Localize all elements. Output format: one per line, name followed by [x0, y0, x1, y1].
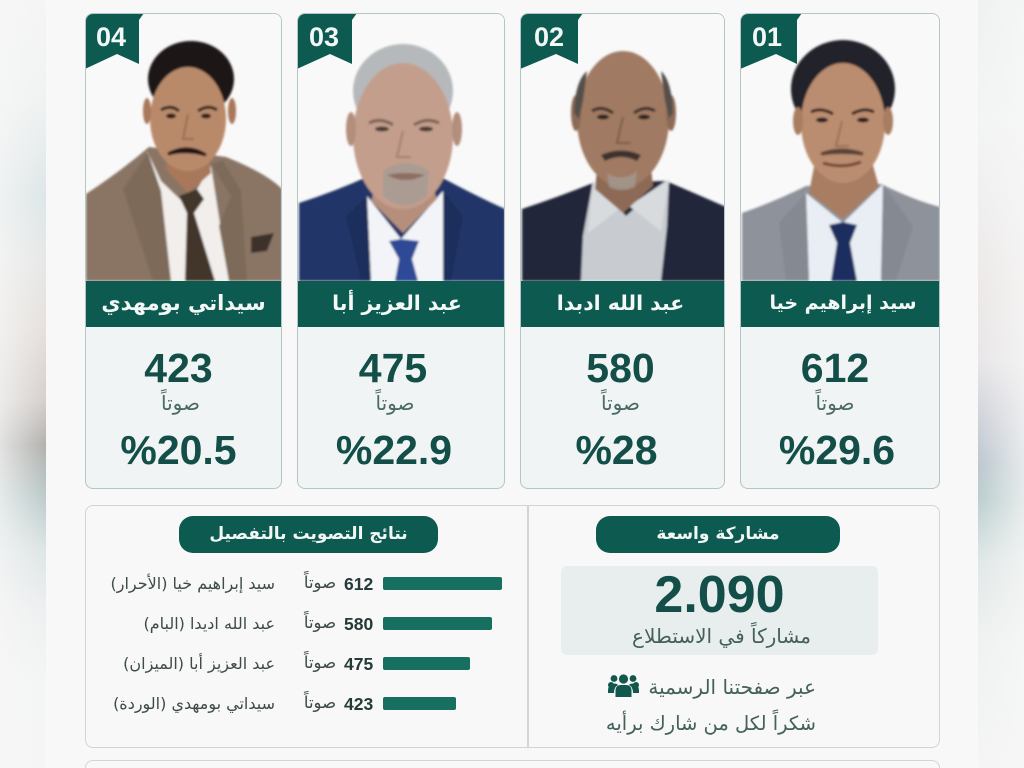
- name band: عبد الله ادبدا: [557, 291, 684, 315]
- panel: summary: [85, 505, 940, 748]
- text: thanks to all participants: شكراً لكل من شارك برأيه: [606, 712, 816, 735]
- percentage: %28: [575, 427, 658, 473]
- heading: wide participation: مشاركة واسعة: [656, 524, 780, 544]
- percentage: %22.9: [336, 427, 452, 473]
- vote count: 580: [586, 345, 655, 391]
- vote unit: صوتاً: [601, 391, 640, 415]
- candidate card 02: [520, 13, 725, 489]
- portrait: Sid Ibrahim Khaya: [741, 14, 939, 281]
- name band: سيداتي بومهدي: [101, 291, 266, 315]
- heading: wide participation: [596, 516, 840, 553]
- row: Abdallahi Adabda: صوتاً: [304, 613, 336, 632]
- text: via our official page: عبر صفحتنا الرسمية: [648, 675, 816, 699]
- name band: سيد إبراهيم خيا: [769, 292, 917, 314]
- name band: [86, 281, 281, 327]
- row: Abdel Aziz Abba: صوتاً: [304, 653, 336, 672]
- rank ribbon 02: [521, 14, 582, 69]
- row: Sid Ibrahim Khaya: صوتاً: [304, 573, 336, 592]
- name band: عبد العزيز أبا: [332, 291, 462, 315]
- row: Sidaty Boumehdi: صوتاً: [304, 693, 336, 712]
- panel: next section, cut off at the bottom: [85, 760, 940, 768]
- vote count: 423: [144, 345, 213, 391]
- row: Sidaty Boumehdi: سيداتي بومهدي (الوردة): [113, 694, 275, 713]
- rank ribbon 02: 02: [534, 22, 564, 52]
- row: Abdel Aziz Abba: 475: [344, 654, 373, 674]
- row: Abdallahi Adabda: عبد الله اديدا (البام): [143, 614, 275, 633]
- divider: [527, 506, 528, 747]
- row: Sidaty Boumehdi: [113, 690, 456, 714]
- rank ribbon 03: 03: [309, 22, 339, 52]
- row: Abdel Aziz Abba: [123, 650, 470, 674]
- row: Abdallahi Adabda: 580: [344, 614, 373, 634]
- percentage: %29.6: [779, 427, 895, 473]
- rank ribbon 04: 04: [96, 22, 126, 52]
- blurred left background strip: [0, 0, 46, 768]
- row: Sid Ibrahim Khaya: [110, 570, 502, 594]
- vote unit: صوتاً: [161, 391, 200, 415]
- icon: group of people: [608, 674, 639, 697]
- name band: [741, 281, 939, 327]
- candidate card 03: [297, 13, 505, 489]
- candidate card 01: [740, 13, 940, 489]
- row: Sidaty Boumehdi: 423: [344, 694, 373, 714]
- row: Sid Ibrahim Khaya: 612: [344, 574, 373, 594]
- total number: 2.090: [654, 566, 785, 624]
- rank ribbon 03: [298, 14, 356, 68]
- row: Sid Ibrahim Khaya: سيد إبراهيم خيا (الأحرار): [110, 574, 275, 593]
- bar chart: votes per candidate: [110, 570, 502, 714]
- vote unit: صوتاً: [376, 391, 414, 415]
- vote unit: صوتاً: [816, 391, 854, 415]
- rank ribbon 01: 01: [752, 22, 782, 52]
- name band: [521, 281, 724, 327]
- rank ribbon 01: [741, 14, 802, 69]
- vote count: 475: [359, 345, 427, 391]
- stat box: total participants: [561, 566, 878, 655]
- candidate card 04: [85, 13, 282, 489]
- portrait: Sidaty Boumehdi: [86, 14, 281, 281]
- portrait: Abdallahi Adabda: [521, 14, 724, 281]
- row: Abdallahi Adabda: [143, 610, 492, 634]
- vote count: 612: [801, 345, 869, 391]
- total caption: مشاركاً في الاستطلاع: [632, 624, 811, 648]
- heading: detailed voting results: نتائج التصويت بالتفصيل: [209, 524, 408, 544]
- portrait: Abdel Aziz Abba: [298, 14, 504, 281]
- row: Abdel Aziz Abba: عبد العزيز أبا (الميزان): [123, 654, 275, 673]
- heading: detailed voting results: [179, 516, 438, 553]
- rank ribbon 04: [86, 14, 144, 68]
- percentage: %20.5: [120, 427, 237, 473]
- blurred right background strip: [978, 0, 1024, 768]
- name band: [298, 281, 504, 327]
